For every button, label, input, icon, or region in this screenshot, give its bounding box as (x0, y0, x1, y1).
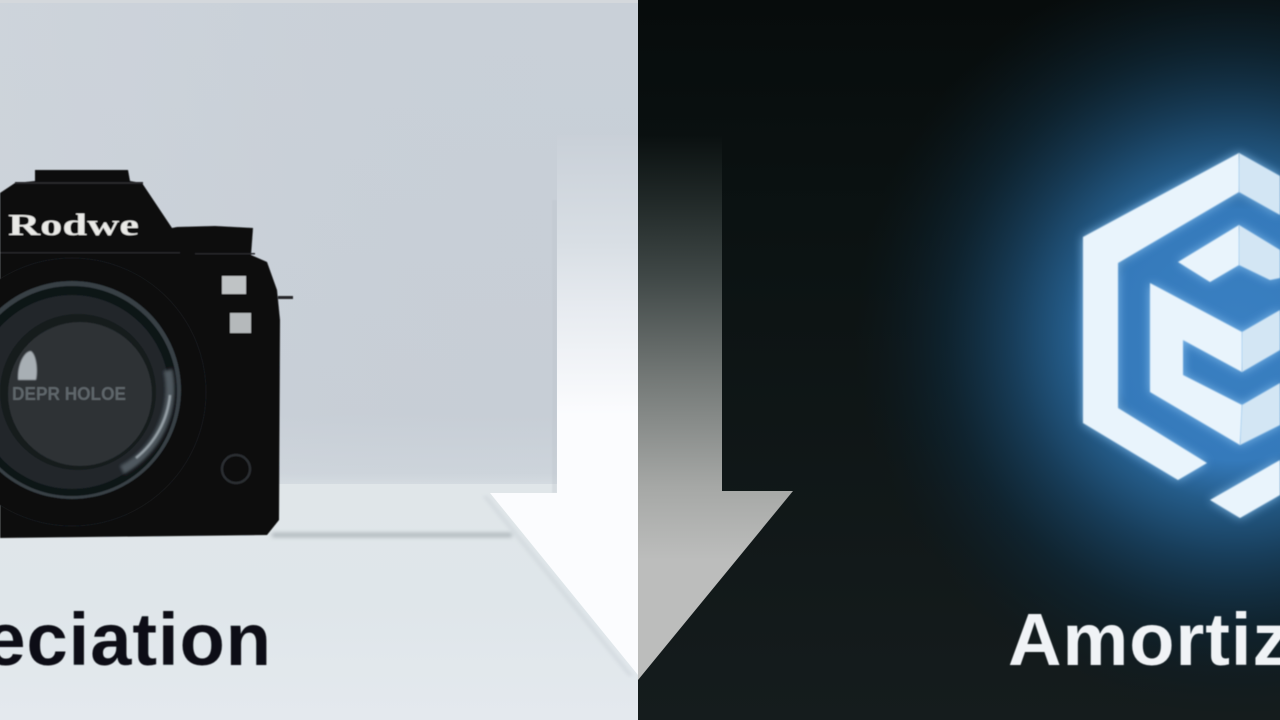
arrow left half (490, 135, 638, 675)
lens text: DEPR HOLOE (12, 384, 126, 404)
camera top seams (0, 182, 255, 254)
arrow right half (638, 135, 793, 680)
panel: depreciation light background (0, 0, 638, 720)
camera body (0, 170, 280, 538)
camera side button (278, 296, 293, 299)
panel: amortization dark background (638, 0, 1280, 720)
logo glow (1083, 153, 1280, 518)
icon: black camera (0, 170, 293, 538)
camera dial button (222, 455, 250, 483)
camera lens (0, 258, 206, 526)
camera control squares (222, 276, 251, 333)
arrow: downward split arrow (490, 135, 793, 680)
icon: glowing hexagonal logo (1083, 153, 1280, 518)
logo shapes (1083, 153, 1280, 518)
camera brand label: Rodwe (8, 207, 139, 242)
logo right facets (1239, 153, 1280, 445)
